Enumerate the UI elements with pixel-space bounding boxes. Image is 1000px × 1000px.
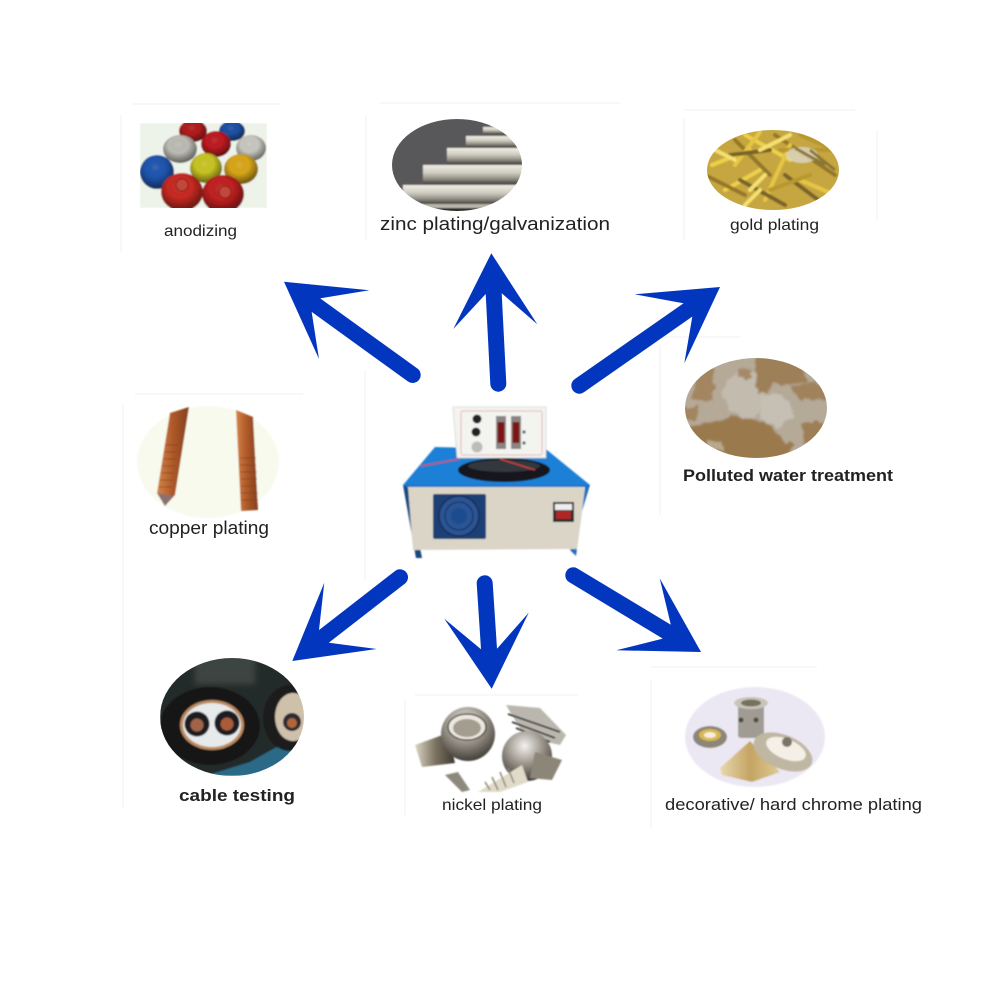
arrow: to decorative chrome plating	[573, 575, 701, 652]
image: copper plated screws	[137, 406, 279, 518]
image: anodized coloured parts	[140, 120, 267, 213]
image: cable cross-section	[160, 658, 304, 776]
panel: anodizing	[140, 120, 267, 240]
label: copper plating: copper plating	[149, 518, 269, 538]
panel: nickel plating	[415, 705, 566, 814]
panel: decorative / hard chrome plating	[665, 687, 922, 814]
device cabinet	[403, 407, 590, 558]
label: nickel plating: nickel plating	[442, 797, 542, 814]
image: zinc plated rods	[390, 118, 525, 213]
arrow: to cable testing	[292, 577, 400, 661]
cable coil	[458, 458, 550, 482]
label: cable testing: cable testing	[179, 786, 295, 805]
panel: polluted water treatment	[684, 358, 893, 481]
arrow: to anodizing	[284, 282, 413, 375]
image: nickel plated parts	[415, 705, 566, 792]
control panel	[453, 407, 546, 458]
arrow: to zinc plating	[453, 253, 537, 384]
label: zinc plating/galvanization: zinc plating/galvanization	[380, 214, 610, 234]
panel: copper plating	[137, 406, 279, 538]
panel: central rectifier device	[403, 407, 590, 558]
image: polluted water	[685, 358, 827, 458]
image: chrome plated parts	[685, 687, 825, 787]
panel: gold plating	[705, 128, 841, 234]
image: gold plated pins	[705, 128, 841, 212]
label: decorative / hard chrome plating: decorative/ hard chrome plating	[665, 796, 922, 814]
label: anodizing: anodizing	[164, 223, 237, 240]
panel: cable testing	[160, 658, 304, 804]
label: gold plating: gold plating	[730, 217, 819, 234]
arrow: to nickel plating	[444, 583, 529, 689]
panel: zinc plating	[380, 118, 610, 234]
icon: cooling fan	[433, 494, 486, 539]
label: Polluted water treatment: Polluted water treatment	[683, 466, 893, 485]
icon: power switch	[553, 502, 574, 522]
arrow: to gold plating	[579, 287, 720, 386]
